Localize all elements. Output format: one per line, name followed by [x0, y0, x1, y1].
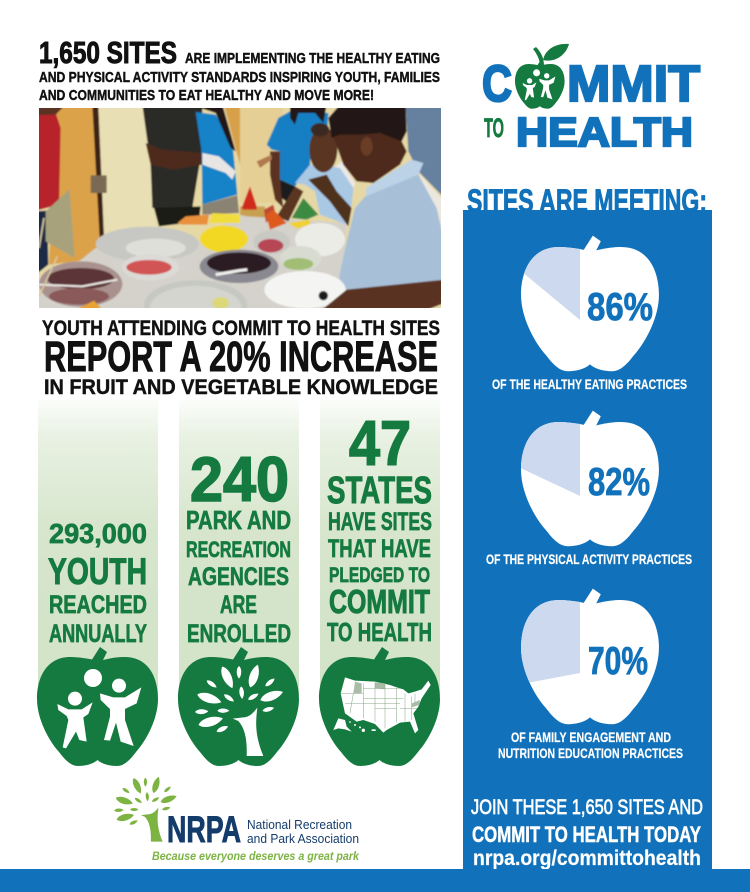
NRPA tree icon	[114, 776, 178, 842]
organisation name line 1: National Recreation	[247, 817, 352, 832]
label: reached: REACHED	[49, 591, 147, 619]
logo word HEALTH: HEALTH	[516, 109, 693, 155]
apple chart: 82 percent	[520, 410, 659, 546]
caption: physical activity: OF THE PHYSICAL ACTIVITY PRACTICES	[486, 552, 692, 567]
logo: NRPA	[114, 776, 360, 863]
bottom blue bar	[0, 869, 750, 892]
apple chart: 70 percent	[521, 588, 659, 724]
caption: family engagement line 1: OF FAMILY ENGAGEMENT AND	[511, 730, 671, 745]
label: youth: YOUTH	[48, 550, 147, 592]
intro line 3: AND COMMUNITIES TO EAT HEALTHY AND MOVE MORE!	[39, 87, 374, 104]
value: 86%: 86%	[587, 286, 653, 329]
apple chart: 86 percent	[521, 236, 659, 372]
heading line 2: REPORT A 20% INCREASE	[44, 334, 438, 381]
tagline: Because everyone deserves a great park	[152, 849, 360, 863]
panel: states	[319, 400, 440, 766]
label: commit: COMMIT	[329, 584, 430, 621]
logo letter C: C	[482, 55, 512, 112]
label: recreation: RECREATION	[186, 537, 291, 562]
logo word TO: TO	[484, 113, 504, 143]
panel: blue sites meeting	[463, 210, 712, 869]
intro text	[39, 36, 440, 104]
caption: healthy eating: OF THE HEALTHY EATING PRACTICES	[492, 377, 687, 392]
caption: family engagement line 2: NUTRITION EDUCATION PRACTICES	[498, 746, 683, 761]
label: park and: PARK AND	[186, 505, 291, 535]
label: to health: TO HEALTH	[327, 617, 432, 647]
stat: 47: 47	[349, 409, 411, 479]
panel: youth reached	[37, 400, 158, 766]
icon: green apple with US map	[319, 647, 440, 766]
label: are: ARE	[220, 591, 257, 619]
panel: agencies enrolled	[178, 400, 299, 766]
stat: 293,000: 293,000	[49, 518, 147, 549]
value: 70%: 70%	[588, 640, 648, 683]
heading: youth report increase	[42, 317, 440, 399]
label: that have: THAT HAVE	[328, 535, 431, 563]
intro line 1: ARE IMPLEMENTING THE HEALTHY EATING	[185, 50, 440, 67]
icon: green apple with children	[37, 647, 158, 766]
label: agencies: AGENCIES	[188, 563, 289, 591]
icon: green apple with tree	[178, 647, 299, 766]
logo letters MMIT: MMIT	[567, 55, 700, 112]
stat: 240: 240	[190, 445, 289, 515]
label: annually: ANNUALLY	[49, 620, 147, 648]
heading line 3: IN FRUIT AND VEGETABLE KNOWLEDGE	[44, 376, 438, 399]
headline: 1,650 sites: 1,650 SITES	[39, 36, 177, 70]
label: have sites: HAVE SITES	[328, 508, 432, 536]
label: states: STATES	[327, 470, 432, 512]
value: 82%: 82%	[588, 461, 650, 504]
heading line 1: YOUTH ATTENDING COMMIT TO HEALTH SITES	[42, 317, 440, 340]
intro line 2: AND PHYSICAL ACTIVITY STANDARDS INSPIRING YOUTH, FAMILIES	[39, 69, 440, 86]
NRPA letters: NRPA	[167, 809, 241, 850]
logo: Commit to Health	[482, 44, 700, 155]
label: pledged to: PLEDGED TO	[329, 564, 430, 587]
label: enrolled: ENROLLED	[187, 620, 291, 648]
logo apple	[515, 44, 569, 109]
call to action url: nrpa.org/committohealth	[473, 847, 701, 870]
organisation name line 2: and Park Association	[247, 831, 359, 846]
photo: children at fruit table	[39, 108, 441, 308]
